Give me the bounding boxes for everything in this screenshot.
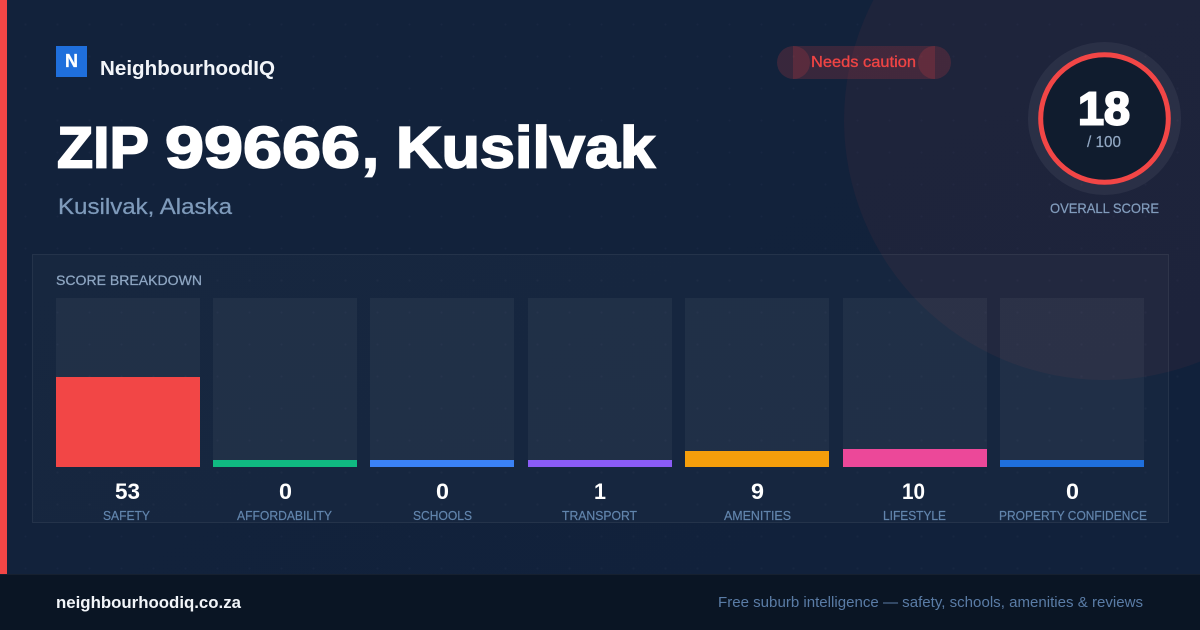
brand logo and name <box>56 46 275 80</box>
footer <box>0 574 1200 630</box>
title <box>57 116 655 180</box>
bar: property confidence <box>999 298 1147 523</box>
status badge: needs caution <box>777 46 951 79</box>
bar: property confidence: PROPERTY CONFIDENCE <box>999 508 1147 523</box>
bar: amenities: 9 <box>751 479 764 504</box>
bar: transport: 1 <box>594 479 606 504</box>
bar: amenities <box>685 298 829 523</box>
icon: N logo: N <box>65 51 78 71</box>
bar: transport <box>528 298 672 523</box>
decorative background circle <box>844 0 1200 380</box>
bar: amenities: AMENITIES <box>724 508 791 523</box>
bar: lifestyle: 10 <box>902 479 925 504</box>
bar: schools: 0 <box>436 479 449 504</box>
footer site address: neighbourhoodiq.co.za <box>56 593 242 612</box>
bar: safety: SAFETY <box>103 508 150 523</box>
bar: property confidence: 0 <box>1066 479 1079 504</box>
bar: affordability: 0 <box>279 479 292 504</box>
brand name: NeighbourhoodIQ <box>100 58 275 80</box>
bar: lifestyle: LIFESTYLE <box>883 508 946 523</box>
bar: affordability: AFFORDABILITY <box>237 508 332 523</box>
title: Kusilvak <box>396 116 655 180</box>
score label: OVERALL SCORE <box>1050 200 1159 216</box>
footer tagline: Free suburb intelligence — safety, schools, amenities & reviews <box>718 595 1143 611</box>
left accent bar <box>0 0 7 574</box>
subtitle: Kusilvak, Alaska <box>58 194 233 219</box>
panel heading: SCORE BREAKDOWN <box>56 272 202 288</box>
title: ZIP <box>57 116 149 180</box>
gauge ring <box>1028 42 1181 195</box>
score scale: / 100 <box>1087 134 1121 151</box>
score value: 18 <box>1078 82 1130 134</box>
bar: safety <box>56 298 200 523</box>
icon: N logo <box>56 46 87 77</box>
bar: lifestyle <box>843 298 987 523</box>
overall score gauge <box>1028 42 1181 216</box>
bar: schools <box>370 298 514 523</box>
bar: schools: SCHOOLS <box>413 508 472 523</box>
status badge: needs caution: Needs caution <box>811 54 916 71</box>
title: 99666 <box>165 116 360 180</box>
bar: transport: TRANSPORT <box>562 508 637 523</box>
panel: score breakdown <box>32 254 1168 523</box>
bar: affordability <box>213 298 357 523</box>
title: , <box>362 116 379 180</box>
bar: safety: 53 <box>115 479 140 504</box>
